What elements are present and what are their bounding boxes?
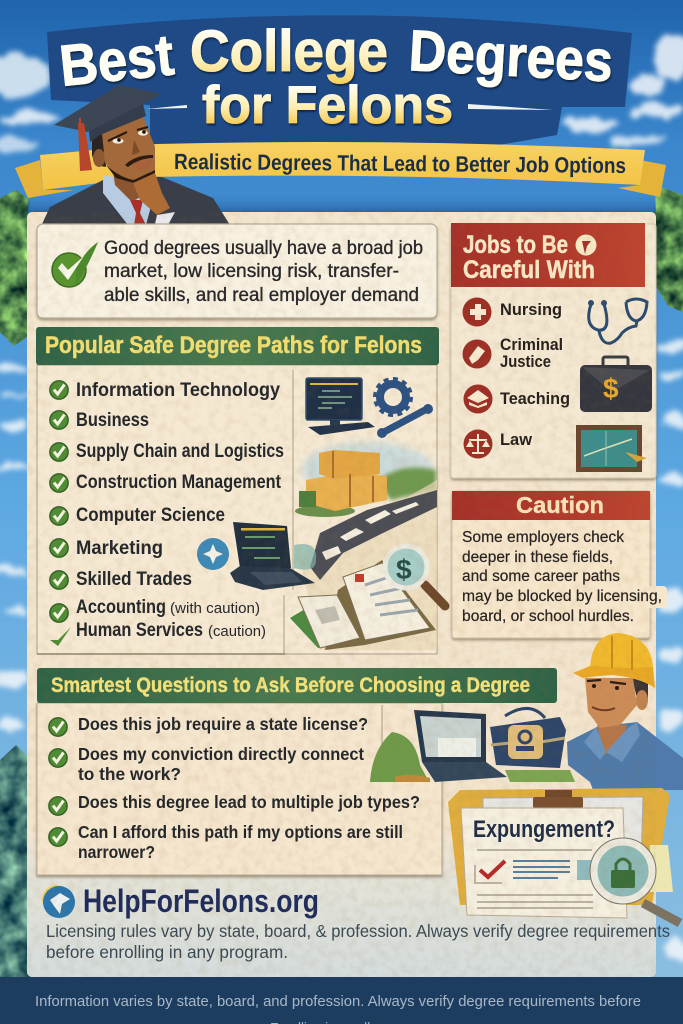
job: criminal justice	[462, 335, 563, 371]
title banner	[47, 15, 632, 150]
licensing note	[46, 921, 670, 962]
title line 2: for Felons	[202, 76, 453, 135]
job: nursing: Nursing	[500, 300, 562, 319]
intro text: Good degrees usually have a broad job	[104, 237, 423, 259]
illustration: bush, laptop and bag	[370, 708, 575, 782]
title line 1: Degrees	[407, 18, 615, 94]
icon: briefcase	[580, 357, 652, 412]
job: criminal justice: Criminal	[500, 335, 563, 354]
intro text: able skills, and real employer demand	[104, 284, 419, 306]
intro text	[104, 237, 423, 306]
degree list: Supply Chain and Logistics	[76, 441, 284, 462]
caution body text: deeper in these fields,	[462, 549, 613, 566]
job: teaching	[464, 384, 570, 414]
job: nursing	[462, 298, 562, 326]
title line 1: College	[190, 19, 388, 84]
job: teaching: Teaching	[500, 389, 570, 408]
graduate illustration	[42, 85, 230, 225]
subtitle text: Realistic Degrees That Lead to Better Job Options	[174, 149, 626, 178]
heading: questions: Smartest Questions to Ask Before Choosing a Degree	[51, 674, 530, 697]
illustration: boxes and road	[294, 442, 437, 650]
heading: caution: Caution	[516, 492, 604, 518]
heading: jobs	[463, 231, 595, 284]
illustration: open book and magnifier: $	[396, 554, 412, 585]
subtitle ribbon	[15, 142, 666, 198]
heading: jobs: Careful With	[463, 256, 595, 284]
caution body text: may be blocked by licensing,	[462, 588, 662, 605]
icon: alert pin	[576, 234, 596, 256]
footer bar: Information varies by state, board, and profession. Always verify degree requirements before	[35, 994, 641, 1010]
title line 1	[57, 18, 615, 99]
illustration: open book and magnifier	[290, 546, 445, 650]
caution body text: board, or school hurdles.	[462, 608, 634, 625]
degree list: Information Technology	[76, 380, 280, 401]
question list	[49, 714, 420, 862]
expungement label: Expungement?	[473, 816, 615, 843]
question list: to the work?	[78, 764, 181, 784]
job: law	[464, 430, 533, 458]
icon: stethoscope	[589, 299, 647, 343]
main cream panel	[27, 212, 656, 977]
title	[57, 18, 615, 135]
job: law: Law	[500, 430, 533, 449]
degree list: Human Services	[76, 620, 203, 641]
degree list: Marketing	[76, 538, 163, 559]
panel: popular safe degree paths	[36, 327, 445, 654]
question list: narrower?	[78, 842, 155, 862]
icon: green check	[52, 242, 98, 287]
question list: Does my conviction directly connect	[78, 744, 364, 764]
degree list: Construction Management	[76, 472, 282, 493]
question list: Does this degree lead to multiple job types?	[78, 792, 420, 812]
illustration: expungement folder	[448, 788, 680, 923]
heading: popular: Popular Safe Degree Paths for Felons	[45, 332, 422, 359]
job: criminal justice: Justice	[500, 352, 551, 371]
degree list: (with caution)	[170, 601, 260, 617]
icon: briefcase: $	[603, 373, 619, 404]
panel: caution	[452, 491, 667, 638]
degree list: Skilled Trades	[76, 569, 192, 590]
title line 1: Best	[57, 22, 177, 99]
illustration: construction worker	[567, 633, 683, 790]
intro text: market, low licensing risk, transfer-	[104, 260, 399, 282]
heading: questions	[37, 668, 557, 703]
heading: jobs: Jobs to Be	[463, 231, 568, 259]
caution body text	[462, 529, 667, 625]
illustration: laptop and sparkle badge	[197, 522, 315, 590]
degree list	[50, 380, 284, 646]
question list: Can I afford this path if my options are still	[78, 822, 403, 842]
degree list: Accounting	[76, 597, 166, 618]
intro callout	[37, 224, 437, 318]
degree list: Business	[76, 410, 149, 431]
panel: smartest questions	[37, 668, 557, 875]
caution body text: Some employers check	[462, 529, 624, 546]
licensing note: before enrolling in any program.	[46, 942, 288, 962]
icon: chalkboard	[576, 425, 647, 472]
heading: popular	[36, 327, 439, 365]
illustration: monitor, gear, wrench	[306, 378, 433, 438]
degree list: (caution)	[208, 624, 266, 640]
panel: jobs to be careful with	[451, 223, 656, 478]
caution body text: and some career paths	[462, 568, 620, 585]
question list: Does this job require a state license?	[78, 714, 368, 734]
logo: HelpForFelons.org: HelpForFelons.org	[83, 883, 319, 919]
degree list: Computer Science	[76, 505, 225, 526]
footer bar	[0, 977, 683, 1024]
